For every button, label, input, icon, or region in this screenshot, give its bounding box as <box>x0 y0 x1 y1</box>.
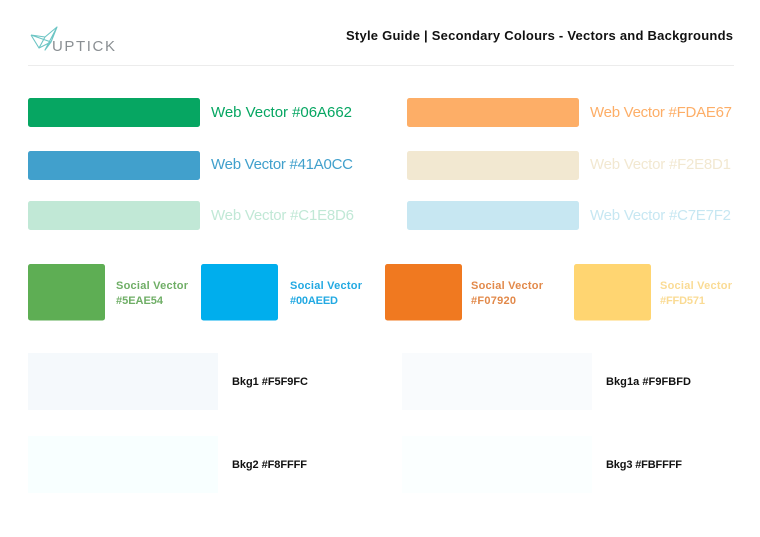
background swatch: Bkg2 <box>28 436 307 493</box>
swatch: web vector FDAE67 <box>407 98 732 127</box>
swatch: social vector 5EAE54 <box>28 264 189 320</box>
swatch: web vector C7E7F2 <box>407 201 731 230</box>
background swatch: Bkg1a <box>402 353 691 410</box>
swatch: web vector 06A662 <box>28 98 352 127</box>
swatch: social vector 5EAE54: Social Vector <box>116 280 189 292</box>
swatch: social vector 00AEED: #00AEED <box>290 295 338 307</box>
swatch: web vector C7E7F2: Web Vector #C7E7F2 <box>590 207 731 224</box>
swatch: social vector 5EAE54: #5EAE54 <box>116 295 164 307</box>
swatch: web vector 41A0CC: Web Vector #41A0CC <box>211 156 353 173</box>
title: Style Guide | Secondary Colours - Vectors and Backgrounds <box>346 28 733 43</box>
logo wordmark: UPTICK <box>52 38 115 55</box>
background swatch: Bkg3: Bkg3 #FBFFFF <box>606 459 682 471</box>
swatch: social vector FFD571 <box>574 264 733 320</box>
swatch: social vector FFD571: Social Vector <box>660 280 733 292</box>
swatch: web vector C1E8D6: Web Vector #C1E8D6 <box>211 207 354 224</box>
swatch: web vector C1E8D6 <box>28 201 354 230</box>
swatch: web vector F2E8D1 <box>407 151 731 180</box>
swatch: web vector 41A0CC <box>28 151 353 180</box>
swatch: web vector 06A662: Web Vector #06A662 <box>211 104 352 121</box>
background swatch: Bkg1a: Bkg1a #F9FBFD <box>606 376 691 388</box>
background swatch: Bkg1 <box>28 353 308 410</box>
background swatch: Bkg1: Bkg1 #F5F9FC <box>232 376 308 388</box>
swatch: social vector 00AEED: Social Vector <box>290 280 363 292</box>
swatch: social vector 00AEED <box>201 264 363 320</box>
background swatch: Bkg3 <box>402 436 682 493</box>
swatch: social vector F07920: #F07920 <box>471 295 516 307</box>
icon: check mark <box>31 27 57 50</box>
logo: Uptick <box>31 27 115 55</box>
swatch: social vector F07920: Social Vector <box>471 280 544 292</box>
swatch: social vector FFD571: #FFD571 <box>660 295 705 307</box>
swatch: web vector FDAE67: Web Vector #FDAE67 <box>590 104 732 121</box>
background swatch: Bkg2: Bkg2 #F8FFFF <box>232 459 307 471</box>
swatch: social vector F07920 <box>385 264 544 320</box>
swatch: web vector F2E8D1: Web Vector #F2E8D1 <box>590 156 731 173</box>
